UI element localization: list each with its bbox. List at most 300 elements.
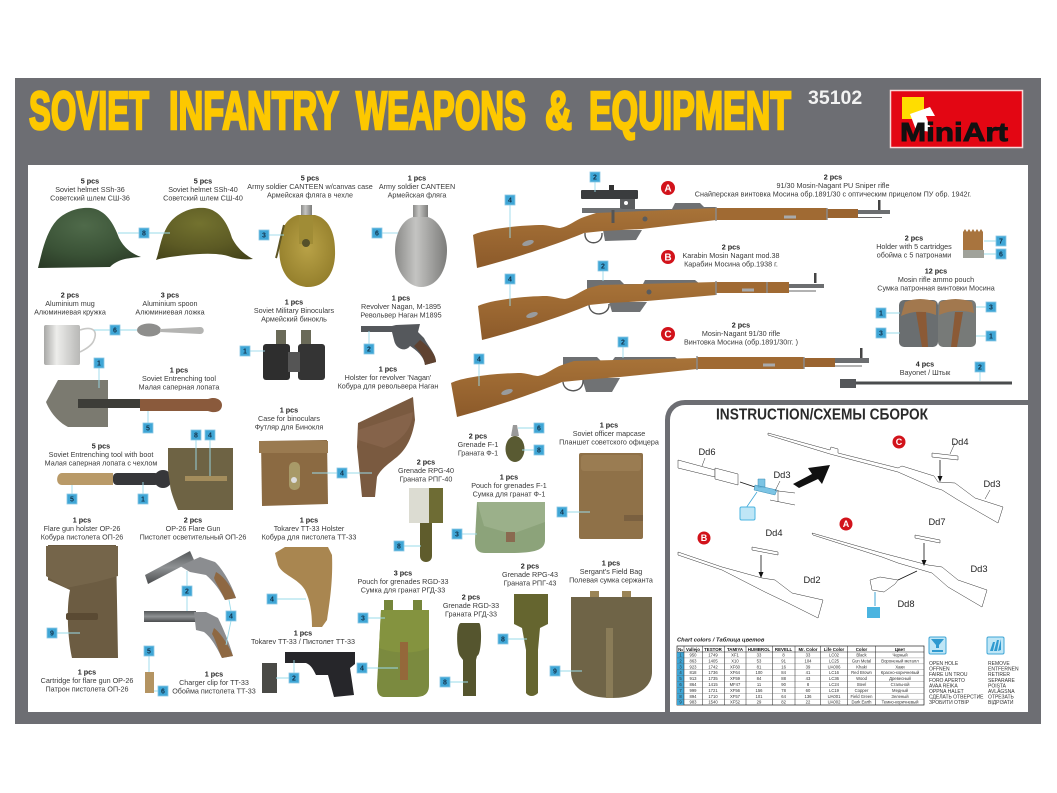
item: RPG-43 grenade: 2 pcs [521,562,539,570]
diagram: rifle A assembly [812,517,988,618]
item: F-1 grenade: 8 [537,448,541,454]
rifle B: carbine mod.38: 4 [508,276,512,284]
item: pouch for RGD-33: Pouch for grenades RGD-33 [357,577,449,586]
item: flare guns OP-26 [140,516,246,658]
table: paint colours: 78 [781,688,787,693]
rifle A: PU sniper: A [664,184,672,194]
item: aluminium mug: 2 pcs [61,290,79,300]
item: RPG-43 grenade: 8 [501,636,505,644]
item: binoculars: 1 [243,348,247,356]
item: canteen with canvas case: Army soldier CANTEEN w/canvas case [247,182,373,191]
legend: open hole: FORO APERTO [929,678,965,684]
table: paint colours: 8 [807,682,810,687]
table: paint colours: 863 [690,658,697,663]
item: helmet SSh-36 [38,176,141,268]
legend: open hole [929,637,984,706]
table: paint colours: 90 [781,682,787,687]
table: paint colours: X10 [731,658,739,663]
table: paint colours: 100 [756,670,763,675]
table: paint colours: 913 [690,676,697,681]
legend: remove: AVLÄGSNA [988,688,1015,695]
panel: instruction [668,402,1028,712]
item: flare cartridge: Cartridge for flare gun OP-26 [41,676,133,685]
item: flare guns OP-26: 2 [185,588,189,596]
table: paint colours: 6 [679,682,682,687]
table: paint colours: 4 [679,670,682,675]
table: paint colours: 16 [781,664,787,669]
table: paint colours: 999 [690,688,697,693]
item: binoculars: 1 pcs [285,298,303,306]
item: bayonet: 2 [978,364,982,372]
diagram: rifle C assembly: C [896,437,903,447]
heading: instruction: INSTRUCTION/СХЕМЫ СБОРОК [716,406,928,424]
item: TT-33 holster: Кобура для пистолета ТТ-33 [262,532,356,542]
rifle C: Mosin-Nagant 91/30: 2 [621,340,625,346]
item: revolver Nagan: Revolver Nagan, M-1895 [361,302,441,311]
table: paint colours: Gun Metal [852,658,871,663]
table: paint colours: № [678,647,683,652]
item: RPG-43 grenade: Граната РПГ-43 [504,578,556,588]
table: paint colours: 101 [756,694,763,699]
table: paint colours: LC16 [829,670,840,675]
item: canteen with canvas case: 5 pcs [301,174,319,182]
item: flare gun holster: Flare gun holster OP-26 [44,524,120,533]
table: paint colours: XF57 [730,694,741,699]
item: pouch for RGD-33: Сумка для гранат РГД-33 [361,586,445,594]
item: rifle ammo pouch: Mosin rifle ammo pouch [898,275,974,284]
item: pouch for grenades F-1: Pouch for grenades F-1 [471,481,547,490]
item: case for binoculars [255,406,328,506]
table: paint colours: 9 [679,700,682,705]
item: flare gun holster: 1 pcs [73,516,91,524]
diagram: rifle A assembly: A [843,519,850,529]
diagram: rifle B assembly [678,528,823,618]
item: officer mapcase: Soviet officer mapcase [573,429,645,438]
item: RPG-40 grenade: Grenade RPG-40 [398,466,454,475]
diagram: rifle C assembly [768,433,1003,523]
item: TT-33 holster [262,516,356,627]
table: paint colours: 81 [757,664,762,669]
item: helmet SSh-36: 5 pcs [81,176,99,186]
item: pouch for RGD-33: 3 [361,616,365,622]
item: rifle ammo pouch: Сумка патронная винтовки Мосина [877,284,995,292]
item: entrenching tool: 5 [146,426,150,432]
tag 6: mug and spoon [94,325,137,335]
item: TT-33 pistol and clip [251,628,355,697]
table: paint colours: 82 [781,700,787,705]
item: RGD-33 grenade: Grenade RGD-33 [443,601,499,610]
item: aluminium spoon [135,290,205,336]
legend: remove: ОТРЕЗАТЬ [988,695,1015,701]
tag 4: case and holster [312,468,372,478]
table: paint colours: Цвет [895,647,906,652]
arrow: detail to rifle [793,465,830,488]
item: F-1 grenade [458,423,544,462]
table: paint colours: XF59 [730,676,741,681]
item: binoculars [240,298,335,380]
table: paint colours: Стальной [891,682,910,687]
table: paint colours: 88 [781,676,787,681]
table: paint colours: 983 [690,700,697,705]
rifle B: carbine mod.38: B [664,252,672,264]
text: holster Nagan caption: Кобура для револьвера Наган [338,382,438,390]
rifle B: carbine mod.38: Карабин Мосина обр.1938 г. [684,260,778,268]
rifle A: PU sniper: Снайперская винтовка Мосина обр.1891/30 с оптическим прицелом ПУ обр. 1942г. [695,190,971,198]
item: entrenching tool with boot: 4 [208,432,212,440]
item: bayonet: Bayonet / Штык [900,368,951,377]
legend: remove: REMOVE [988,661,1010,667]
item: F-1 grenade: 2 pcs [469,432,487,440]
table: paint colours: Steel [857,682,866,687]
diagram: rifle B assembly: Dd2 [803,575,821,585]
item: flare cartridge [41,646,168,696]
table: paint colours: 64 [781,694,787,699]
item: sergeant's field bag: 9 [553,668,557,676]
item: RGD-33 grenade: 2 pcs [462,592,480,602]
item: entrenching tool [46,358,222,433]
table: paint colours: 923 [690,664,697,669]
diagram: muzzle detail [678,447,795,520]
rifle A: PU sniper: 4 [508,198,512,204]
diagram: muzzle detail: Dd6 [698,447,716,457]
diagram: rifle C assembly: Dd3 [983,479,1001,489]
legend: open hole: FAIRE UN TROU [929,672,968,678]
item: canteen with canvas case [247,174,373,287]
item: flare guns OP-26: 2 pcs [184,516,202,524]
legend: remove: SEPARARE [988,678,1016,684]
legend: open hole: AVAA REIKA [929,683,958,689]
item: helmet SSh-36: Soviet helmet SSh-36 [55,185,125,194]
item: entrenching tool with boot: 5 pcs [92,442,110,450]
rifle B: carbine mod.38: Karabin Mosin Nagant mod.38 [682,251,780,260]
chart colors title: Chart colors / Таблица цветов [677,636,765,644]
table: paint colours: 3 [679,664,682,669]
item: canteen with canvas case: 3 [262,232,266,240]
item: rifle ammo pouch: 3 [989,304,993,312]
table: paint colours: Темно-коричневый [882,700,919,705]
diagram: muzzle detail: Dd3 [773,470,791,480]
item: flare cartridge: 5 [147,648,151,656]
item: sergeant's field bag: Sergant's Field Bag [580,567,642,576]
table: paint colours: 1721 [708,688,718,693]
item: holder with 5 cartridges: 6 [999,252,1003,258]
table: paint colours: Copper [855,688,869,693]
item: pouch for RGD-33: 4 [360,666,364,672]
table: paint colours: 8 [782,652,785,658]
rifle A: PU sniper [473,172,971,268]
item: pouch for RGD-33 [357,568,449,697]
item: RPG-40 grenade [394,458,454,562]
table: paint colours: 104 [804,658,812,663]
item: metal canteen [372,174,455,287]
legend: remove: RETIRER [988,672,1010,678]
item: RPG-40 grenade: 8 [397,544,401,550]
rifle C: Mosin-Nagant 91/30: 2 pcs [732,320,750,330]
item: helmet SSh-40: Soviet helmet SSh-40 [168,185,238,194]
item: entrenching tool with boot: 1 [141,496,145,504]
table: paint colours: 1735 [708,676,718,681]
tag 6: mug and spoon: 6 [113,328,117,334]
legend: open hole: ЗРОБИТИ ОТВІР [929,700,970,706]
table: paint colours: UA001 [828,694,841,699]
table: paint colours: 950 [690,652,697,658]
item: rifle ammo pouch: 3 [879,330,883,338]
item: F-1 grenade: Граната Ф-1 [458,448,498,458]
item: pouch for grenades F-1 [452,472,547,553]
table: paint colours: Life Color [824,647,845,652]
table: paint colours: 818 [690,670,697,675]
table: paint colours: XF52 [730,700,741,705]
item: metal canteen: 6 [375,230,379,238]
table: paint colours: XF1 [731,652,740,658]
item: flare cartridge: 1 pcs [78,668,96,676]
item: entrenching tool with boot: Soviet Entrenching tool with boot [49,450,153,459]
rifle B: carbine mod.38 [478,242,824,340]
item: RGD-33 grenade: 8 [443,680,447,686]
title: EQUIPMENT [589,81,791,141]
item: pouch for grenades F-1: Сумка для гранат Ф-1 [473,490,545,498]
table: paint colours: Vallejo [686,647,700,652]
table: paint colours: Red Brown [851,670,873,675]
table: paint colours: 53 [757,658,762,663]
item: binoculars: Soviet Military Binoculars [254,306,335,315]
table: paint colours: 864 [690,682,697,687]
logo: MiniArt [890,90,1022,148]
rifle B: carbine mod.38: 2 pcs [722,242,740,252]
legend: open hole: OFFNEN [929,667,950,673]
title: INFANTRY [169,81,339,141]
table: paint colours: 156 [756,688,763,693]
rifle C: Mosin-Nagant 91/30: 4 [477,356,481,364]
item: entrenching tool with boot [45,430,233,510]
item: flare gun holster: Кобура пистолета ОП-26 [41,532,123,542]
table: paint colours: 2 [679,658,682,663]
diagram: rifle A assembly: Dd8 [897,599,915,609]
table: paint colours: Красно-коричневый [881,670,920,675]
item: sergeant's field bag [550,558,653,698]
item: RGD-33 grenade [440,592,499,696]
item: entrenching tool with boot: 5 [70,496,74,504]
item: flare cartridge: Патрон пистолета ОП-26 [45,684,129,694]
item: holder with 5 cartridges [876,229,1006,260]
rifle C: Mosin-Nagant 91/30: Mosin-Nagant 91/30 rifle [702,329,780,338]
item: helmet SSh-40: Советский шлем СШ-40 [163,194,243,202]
item: rifle ammo pouch [876,266,996,347]
item: pouch for grenades F-1: 3 [455,532,459,538]
table: paint colours: 1415 [708,682,718,687]
rifle B: carbine mod.38: 2 [601,264,605,270]
table: paint colours: Вороненый металл [881,658,919,663]
item: revolver Nagan: 1 pcs [392,294,410,302]
item: sergeant's field bag: Полевая сумка сержанта [569,576,653,584]
rifle A: PU sniper: 2 [593,174,597,182]
rifle C: Mosin-Nagant 91/30: Винтовка Мосина (обр.1891/30гг. ) [684,338,798,346]
legend: open hole: OPEN HOLE [929,661,959,667]
item: entrenching tool with boot: Малая саперная лопата с чехлом [45,458,157,468]
legend: remove: ВІДРІЗАТИ [988,700,1014,706]
item: pouch for RGD-33: 3 pcs [394,568,412,578]
item: rifle ammo pouch: 12 pcs [925,266,947,276]
white content panel [28,165,1028,712]
table: paint colours: 22 [806,700,811,705]
item: revolver Nagan: 2 [367,346,371,354]
table: paint colours: 84 [757,676,762,681]
item: binoculars: Армейский бинокль [261,314,327,324]
table: paint colours: 91 [781,658,787,663]
item: entrenching tool: Soviet Entrenching tool [142,374,216,383]
text: holster Nagan caption: Holster for revolver 'Nagan' [345,373,432,382]
legend: open hole: OPPNA HALET [929,689,964,695]
table: paint colours: Зеленый [891,694,909,699]
item: aluminium mug: Aluminium mug [45,299,95,308]
item: bayonet [840,360,1012,388]
title: & [545,81,572,141]
item: RPG-43 grenade: Grenade RPG-43 [502,570,558,579]
table: paint colours: Color [856,647,868,652]
rifle C: Mosin-Nagant 91/30: C [664,330,672,340]
item: TT-33 holster: Tokarev TT-33 Holster [274,524,345,533]
table: paint colours: 1710 [708,694,718,699]
item: entrenching tool: Малая саперная лопата [139,382,219,392]
table: paint colours: 5 [679,676,682,681]
diagram: rifle A assembly: Dd7 [928,517,946,527]
table: paint colours: 60 [806,688,811,693]
item: canteen with canvas case: Армейская фляга в чехле [267,190,353,200]
text: charger clip caption: Обойма пистолета ТТ-33 [172,686,256,696]
legend: remove: POISTA [988,683,1007,689]
item: metal canteen: Армейская фляга [388,190,446,200]
item: metal canteen: 1 pcs [408,174,426,182]
title [29,81,791,141]
item: TT-33 holster: 1 pcs [300,516,318,524]
rifle C: Mosin-Nagant 91/30 [451,320,869,417]
diagram: rifle B assembly: B [701,533,708,543]
table: paint colours: Черный [892,652,908,658]
item: pouch for grenades F-1: 1 pcs [500,472,518,482]
table: paint colours: 11 [757,682,762,687]
table: paint colours: UA002 [828,700,841,705]
table: paint colours: 1540 [708,700,718,705]
item: aluminium spoon: Алюминиевая ложка [135,308,205,316]
item: holder with 5 cartridges: обойма с 5 патронами [877,250,951,260]
diagram: rifle B assembly: Dd4 [765,528,783,538]
item: rifle ammo pouch: 1 [989,334,993,340]
legend: remove [987,637,1019,706]
item: flare gun holster [41,516,123,658]
item: entrenching tool: 1 pcs [170,366,188,374]
item: helmet SSh-40: 5 pcs [194,176,212,186]
table: paint colours: Mr. Color [798,647,818,652]
table: paint colours: 1749 [708,652,718,658]
item: flare guns OP-26: OP-26 Flare Gun [166,524,220,533]
item: RPG-40 grenade: 2 pcs [417,458,435,466]
table: paint colours: 8 [679,694,682,699]
table: paint colours: 84 [781,670,787,675]
rifle A: PU sniper: 2 pcs [824,172,842,182]
text: holster Nagan caption: 1 pcs [379,364,397,374]
table: paint colours: 41 [806,670,811,675]
item: flare guns OP-26: Пистолет осветительный ОП-26 [140,532,246,542]
table: paint colours: 33 [757,652,762,658]
table: paint colours: LC19 [829,688,840,693]
item: aluminium spoon: Aluminium spoon [142,299,198,308]
table: paint colours: UA006 [828,664,841,669]
text: charger clip caption: Charger clip for TT-33 [179,678,249,687]
item: holder with 5 cartridges: 2 pcs [905,234,923,242]
table: paint colours: Khaki [856,664,867,669]
item: flare gun holster: 9 [50,630,54,638]
item: RGD-33 grenade: Граната РГД-33 [445,610,497,618]
table: paint colours: Wood [856,676,868,681]
table: paint colours: MF47 [730,682,741,687]
item: revolver Nagan: Револьвер Наган М1895 [360,310,442,320]
item: aluminium spoon: 3 pcs [161,290,179,300]
table: paint colours: Древесный [889,676,912,681]
table: paint colours: Black [856,652,868,658]
table: paint colours: REVELL [775,647,793,652]
table: paint colours: Медный [892,688,909,693]
item: helmet SSh-40 [156,176,253,260]
table: paint colours: 1405 [708,658,718,663]
table: paint colours: 33 [806,652,811,658]
item: holder with 5 cartridges: Holder with 5 cartridges [876,242,952,251]
item: revolver Nagan [360,294,442,365]
table: paint colours: XF60 [730,664,741,669]
table: paint colours [677,646,924,705]
table: paint colours: HUMBROL [748,647,771,652]
table: paint colours: 43 [806,676,811,681]
item: holder with 5 cartridges: 7 [999,238,1003,246]
item: TT-33 pistol and clip: 1 pcs [294,628,312,638]
item: TT-33 pistol and clip: Tokarev TT-33 / Пистолет ТТ-33 [251,637,355,646]
table: paint colours: Dark Earth [851,700,872,705]
item: bayonet: 4 pcs [916,360,934,368]
item: F-1 grenade: Grenade F-1 [458,440,498,449]
item: holster for revolver [357,397,415,497]
item: officer mapcase: 1 pcs [600,420,618,430]
item: officer mapcase [557,420,659,539]
table: paint colours: LC02 [829,652,840,658]
table: paint colours: Хаки [895,664,905,669]
item: RPG-40 grenade: Граната РПГ-40 [400,474,452,484]
table: paint colours: 1742 [708,664,718,669]
item: TT-33 holster: 4 [270,596,274,604]
diagram: rifle C assembly: Dd4 [951,437,969,447]
item: aluminium mug [34,290,106,365]
table: paint colours: LC25 [829,658,840,663]
item: metal canteen: Army soldier CANTEEN [379,182,455,191]
table: paint colours: Field Green [851,694,873,699]
item: officer mapcase: Планшет советского офицера [559,438,659,446]
table: paint colours: LC24 [829,682,840,687]
item: F-1 grenade: 6 [537,426,541,432]
item: entrenching tool with boot: 8 [194,432,198,440]
item: rifle ammo pouch: 1 [879,310,883,318]
table: paint colours: 7 [679,688,682,693]
table: paint colours: 894 [690,694,697,699]
label: C marker [892,436,906,448]
item: flare cartridge: 6 [161,688,165,696]
table: paint colours: 136 [804,694,812,699]
legend: remove: ENTFERNEN [988,667,1019,673]
table: paint colours: XF56 [730,688,741,693]
item: TT-33 pistol and clip: 2 [292,676,296,682]
table: paint colours: 29 [757,700,762,705]
title: SOVIET [29,81,149,141]
table: paint colours: XF64 [730,670,741,675]
logo: MiniArt: MiniArt [900,117,1008,147]
product number: 35102 [808,87,862,109]
